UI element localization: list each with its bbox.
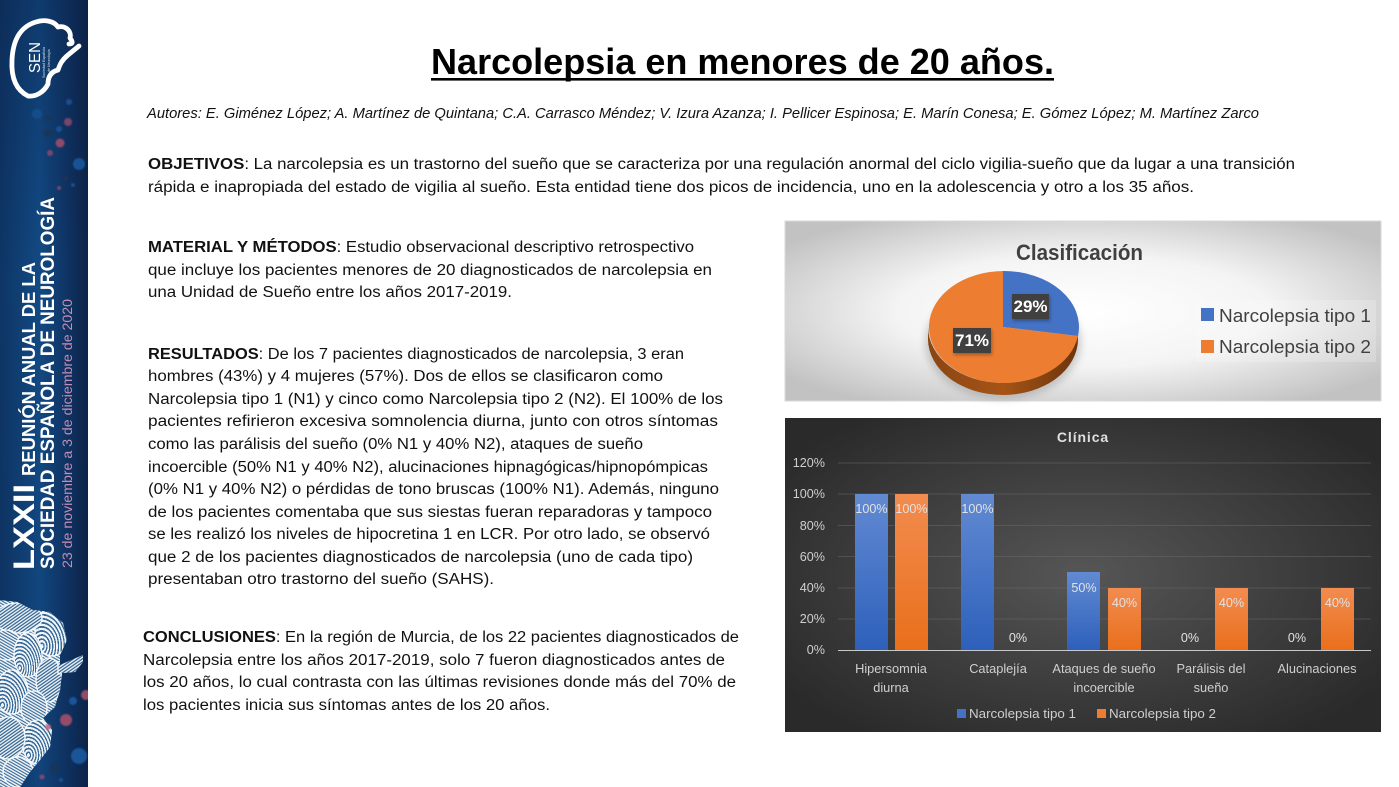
event title, rotated: REUNIÓN ANUAL DE LA [18, 262, 39, 476]
pie slice: tipo 1, 29% [1003, 271, 1079, 336]
category labels: Alucinaciones [1278, 661, 1356, 676]
authors: Autores: E. Giménez López; A. Martínez de Quintana; C.A. Carrasco Méndez; V. Izura Azanza; I. Pellicer Espinosa; E. Marín Conesa; E. Gómez López; M. Martínez Zarco [146, 106, 1259, 122]
bar chart legend: Narcolepsia tipo 2 [1109, 706, 1216, 721]
category labels: Ataques de sueño [1052, 661, 1156, 676]
data label 71%: 71% [955, 331, 989, 350]
bar value labels: 100% [855, 502, 888, 516]
y axis labels: 20% [800, 612, 825, 626]
SEN logo: Sociedad Española [42, 47, 46, 78]
bar value labels: 0% [1181, 631, 1199, 645]
text block: material y métodos: MATERIAL Y MÉTODOS : Estudio observacional descriptivo retrospectivo [148, 239, 694, 256]
category labels: incoercible [1073, 680, 1135, 695]
bar value labels [855, 502, 1350, 645]
text block: conclusiones: Narcolepsia entre los años 2017-2019, solo 7 fueron diagnosticados antes de [143, 652, 725, 669]
y axis labels: 40% [800, 581, 825, 595]
bar value labels: 40% [1112, 596, 1137, 610]
y axis labels: 120% [793, 456, 825, 470]
category labels: sueño [1194, 680, 1228, 695]
text block: material y métodos [148, 239, 712, 301]
y axis labels: 60% [800, 550, 825, 564]
panel: pie chart clasificación [785, 221, 1381, 401]
text block: material y métodos: una Unidad de Sueño entre los años 2017-2019. [148, 284, 512, 301]
bar chart title: Clínica [1057, 429, 1109, 445]
decorative molecule dots, upper [32, 99, 85, 190]
text block: conclusiones: CONCLUSIONES : En la región de Murcia, de los 22 pacientes diagnosticados de [143, 629, 739, 646]
text block: resultados: que 2 de los pacientes diagnosticados de narcolepsia (uno de cada tipo) [148, 549, 693, 566]
event title, rotated: SOCIEDAD ESPAÑOLA DE NEUROLOGÍA [37, 197, 59, 569]
text block: objetivos: OBJETIVOS : La narcolepsia es un trastorno del sueño que se caracteriza por una regulación anormal del ciclo vigilia-sueño que da lugar a una transición [148, 156, 1295, 173]
pie legend [1196, 300, 1376, 362]
brain illustration [0, 598, 88, 787]
text block: objetivos [148, 156, 1295, 196]
bar chart legend [957, 706, 1216, 721]
panel: bar chart clínica [785, 418, 1381, 732]
text block: resultados: de los pacientes comentaba que sus siestas fueran reparadoras y tampoco [148, 504, 712, 521]
text block: resultados: (0% N1 y 40% N2) o pérdidas de tono bruscas (100% N1). Además, ninguno [148, 481, 719, 498]
SEN logo: SEN [27, 42, 44, 73]
pie legend: Narcolepsia tipo 1 [1219, 306, 1371, 326]
category labels: diurna [873, 680, 910, 695]
bar value labels: 40% [1325, 596, 1350, 610]
category labels: Cataplejía [969, 661, 1028, 676]
title: Narcolepsia en menores de 20 años. [431, 41, 1054, 82]
SEN logo [12, 21, 79, 96]
y axis labels: 0% [807, 643, 825, 657]
text block: resultados: Narcolepsia tipo 1 (N1) y cinco como Narcolepsia tipo 2 (N2). El 100% de los [148, 391, 723, 408]
text block: resultados: incoercible (50% N1 y 40% N2), alucinaciones hipnagógicas/hipnopómpicas [148, 459, 708, 476]
data label 29%: 29% [1013, 297, 1048, 316]
text block: material y métodos: que incluye los pacientes menores de 20 diagnosticados de narcolepsia en [148, 262, 712, 279]
bar value labels: 50% [1071, 581, 1097, 595]
data label 29% [1012, 294, 1050, 321]
decorative molecule dots, lower [40, 690, 91, 782]
pie slice: tipo 2, 71% [929, 271, 1078, 383]
bar value labels: 100% [961, 502, 994, 516]
bar value labels: 0% [1009, 631, 1027, 645]
SEN logo: de Neurología [47, 49, 51, 72]
category labels: Hipersomnia [855, 661, 928, 676]
text block: resultados: hombres (43%) y 4 mujeres (57%). Dos de ellos se clasificaron como [148, 368, 663, 385]
text block: conclusiones: los pacientes inicia sus síntomas antes de los 20 años. [143, 697, 550, 714]
text block: resultados: pacientes refirieron excesiva somnolencia diurna, junto con otros síntomas [148, 413, 718, 430]
category labels [855, 661, 1356, 695]
bar value labels: 0% [1288, 631, 1306, 645]
event title, rotated [14, 198, 54, 568]
text block: resultados: presentaban otro trastorno del sueño (SAHS). [148, 571, 494, 588]
text block: conclusiones [143, 629, 739, 714]
text block: resultados: RESULTADOS : De los 7 pacientes diagnosticados de narcolepsia, 3 eran [148, 346, 684, 363]
text block: resultados: como las parálisis del sueño (0% N1 y 40% N2), ataques de sueño [148, 436, 643, 453]
bar value labels: 40% [1219, 596, 1244, 610]
y axis labels [793, 456, 825, 657]
pie chart title: Clasificación [1016, 240, 1143, 265]
pie legend: Narcolepsia tipo 2 [1219, 337, 1371, 357]
text block: conclusiones: los 20 años, lo cual contrasta con las últimas revisiones donde más del 70% de [143, 674, 736, 691]
sidebar [0, 0, 91, 787]
bar chart legend: Narcolepsia tipo 1 [969, 706, 1076, 721]
event date, rotated: 23 de noviembre a 3 de diciembre de 2020 [60, 299, 75, 568]
event title, rotated: LXXII [8, 484, 41, 570]
text block: resultados [148, 346, 723, 588]
bars [855, 494, 1354, 650]
y axis labels: 100% [793, 487, 825, 501]
data label 71% [953, 328, 992, 355]
pie chart [925, 271, 1081, 399]
y axis labels: 80% [800, 519, 825, 533]
text block: objetivos: rápida e inapropiada del estado de vigilia al sueño. Esta entidad tiene dos picos de incidencia, uno en la adolescencia y otro a los 35 años. [148, 179, 1194, 196]
text block: resultados: se les realizó los niveles de hipocretina 1 en LCR. Por otro lado, se observó [148, 526, 710, 543]
bar value labels: 100% [895, 502, 928, 516]
category labels: Parálisis del [1176, 661, 1246, 676]
